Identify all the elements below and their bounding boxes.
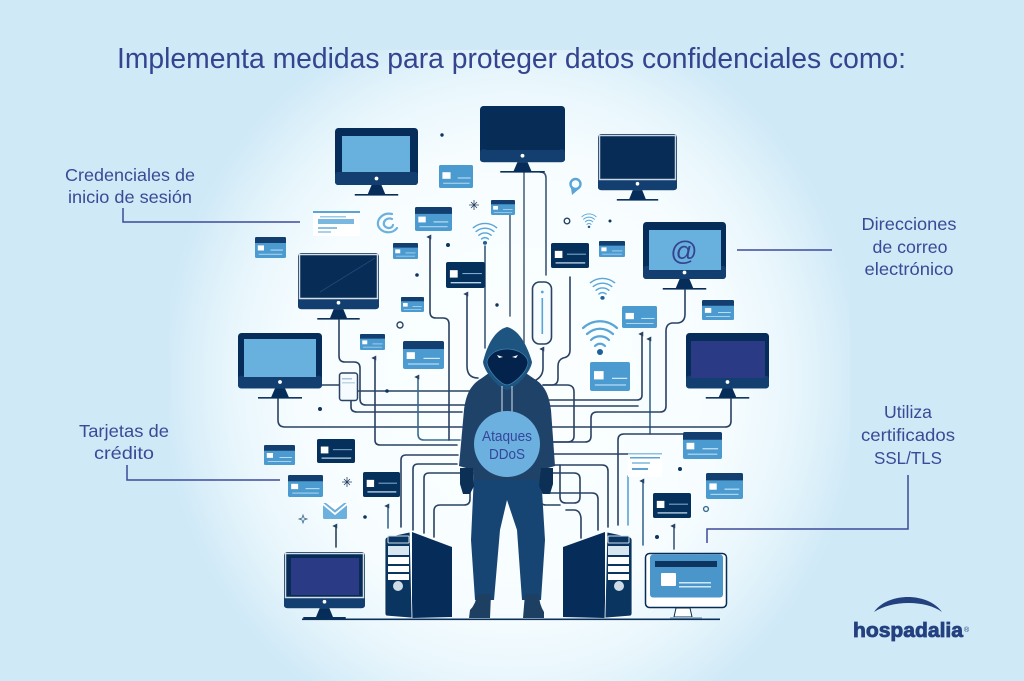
credit cards: [255, 165, 743, 518]
callout: direcciones de correo: Direcciones: [862, 214, 957, 234]
monitor: right purple: [686, 333, 769, 399]
icon: spiral: [378, 214, 397, 232]
callout: tarjetas de crédito: Tarjetas de: [79, 421, 169, 441]
callout: direcciones de correo: [737, 214, 957, 279]
small dots and sparkles: [299, 133, 708, 539]
monitor: top left blue: [335, 128, 418, 196]
hoodie body: [459, 360, 555, 480]
monitor: at sign email: [643, 222, 726, 290]
icon: wifi large: [583, 321, 617, 355]
callout: certificados SSL/TLS: [707, 402, 955, 543]
callout: tarjetas de crédito: crédito: [94, 443, 154, 463]
logo: hospadalia: [853, 597, 970, 642]
icon: tall pill device: [532, 282, 552, 344]
monitor: left dark: [298, 253, 379, 320]
monitor: bottom left purple: [284, 552, 365, 619]
icon: wifi small top: [473, 223, 497, 245]
monitor: at sign email: @: [670, 236, 698, 266]
boots: [469, 594, 544, 618]
callout: credenciales: Credenciales de: [65, 165, 195, 185]
icon: envelope: [323, 503, 347, 519]
icon: document right: [628, 453, 662, 477]
callout: direcciones de correo: electrónico: [864, 259, 954, 279]
face shadow: [487, 349, 528, 385]
badge: Ataques DDoS: Ataques: [482, 429, 532, 445]
icon: wifi small right: [582, 214, 596, 228]
callout: direcciones de correo: de correo: [872, 237, 948, 257]
callout: certificados SSL/TLS: Utiliza: [884, 402, 932, 422]
monitor: top right dark: [598, 134, 677, 201]
badge: Ataques DDoS: DDoS: [489, 447, 525, 463]
callout: credenciales: inicio de sesión: [68, 187, 192, 207]
monitor: top centre dark: [480, 106, 565, 173]
hacker figure: [459, 327, 555, 618]
icon: location pin: [570, 179, 580, 195]
logo: hospadalia: hospadalia: [853, 620, 964, 642]
central glow panel: [170, 50, 850, 681]
monitor: bottom right web page: [646, 554, 726, 619]
server right: [563, 532, 632, 618]
eyes: [497, 355, 518, 358]
hands: [460, 468, 553, 494]
logo: hospadalia: ®: [964, 626, 970, 634]
icon: phone: [340, 373, 358, 400]
ground line: [302, 618, 720, 620]
monitor: far left blue: [238, 333, 322, 399]
icon: wifi medium: [590, 278, 615, 300]
callout: certificados SSL/TLS: certificados: [861, 425, 955, 445]
jeans: [471, 474, 545, 600]
callout: credenciales: [65, 165, 300, 222]
badge: Ataques DDoS: [474, 411, 540, 477]
server left: [385, 532, 452, 618]
hood: [483, 327, 532, 390]
network wires: [278, 172, 731, 549]
title: Implementa medidas para proteger datos confidenciales como:: [117, 43, 906, 75]
hood strings: [502, 386, 512, 412]
callout: tarjetas de crédito: [79, 421, 280, 480]
callout: certificados SSL/TLS: SSL/TLS: [874, 448, 942, 468]
icon: login form document: [313, 211, 360, 236]
